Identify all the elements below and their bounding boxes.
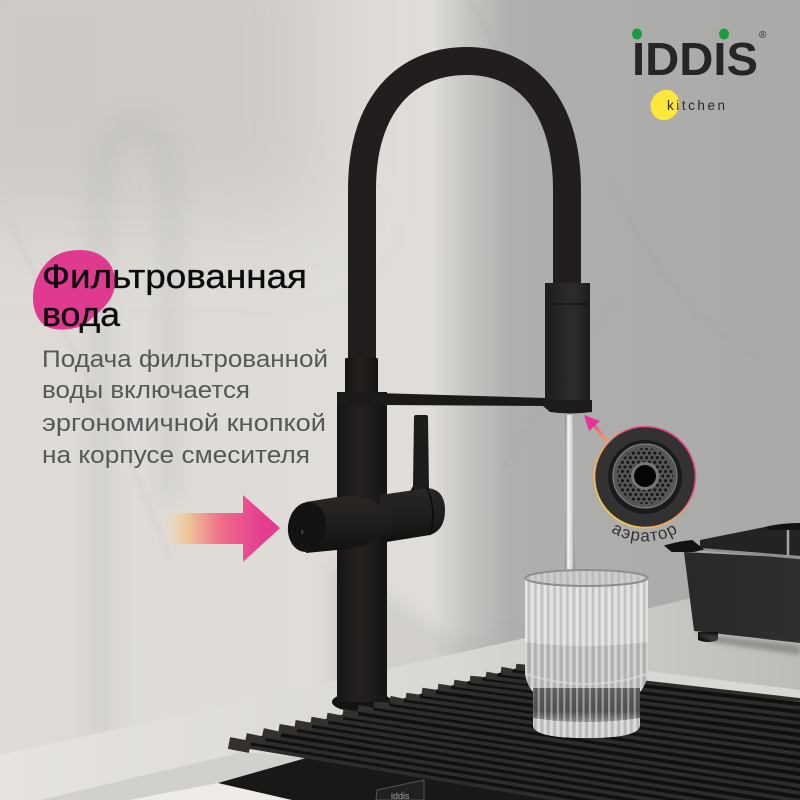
mat rods <box>232 668 800 800</box>
description text: Подача фильтрованной <box>42 346 328 373</box>
aerator disc <box>608 440 682 514</box>
faucet base <box>332 692 392 712</box>
yellow blob <box>645 85 685 125</box>
drying mat <box>229 667 800 800</box>
pink blob behind title <box>33 250 115 330</box>
drying tray <box>666 523 800 655</box>
aerator pointer arrow <box>584 415 607 441</box>
countertop <box>0 572 800 800</box>
title <box>42 258 307 334</box>
logo <box>632 28 767 125</box>
filter button <box>285 500 329 554</box>
registered mark: ® <box>759 30 767 41</box>
logo wordmark: IDDIS <box>632 33 758 85</box>
dark lower section of glass <box>533 688 640 726</box>
glass rim <box>526 570 648 586</box>
aerator label: аэратор <box>612 525 676 544</box>
water stream <box>565 415 575 572</box>
pink arrow <box>163 495 280 562</box>
title: вода <box>42 296 120 334</box>
aerator gradient ring <box>594 426 696 528</box>
kitchen wordmark: kitchen <box>667 98 725 113</box>
description text <box>42 346 328 469</box>
sink edge and basin <box>40 752 580 800</box>
spray head <box>543 283 592 414</box>
sink logo tag <box>376 780 424 800</box>
lever handle <box>408 415 440 502</box>
description text: на корпусе смесителя <box>42 442 310 469</box>
logo green dots <box>632 28 729 40</box>
faucet column <box>337 392 387 702</box>
mat rod end caps <box>229 743 250 747</box>
filter button housing <box>306 496 392 553</box>
horizontal support bar <box>337 393 546 406</box>
pull-down spout arc <box>362 61 567 365</box>
faucet <box>285 61 592 702</box>
glass <box>525 569 648 738</box>
aerator callout <box>584 415 696 544</box>
water inside glass <box>525 642 648 690</box>
title: Фильтрованная <box>42 258 307 296</box>
right cylinder <box>380 488 445 543</box>
counter front edge strip <box>640 670 800 706</box>
glass ribs <box>525 569 648 738</box>
description text: эргономичной кнопкой <box>42 410 326 437</box>
description text: воды включается <box>42 377 250 404</box>
spout collar <box>345 358 378 395</box>
